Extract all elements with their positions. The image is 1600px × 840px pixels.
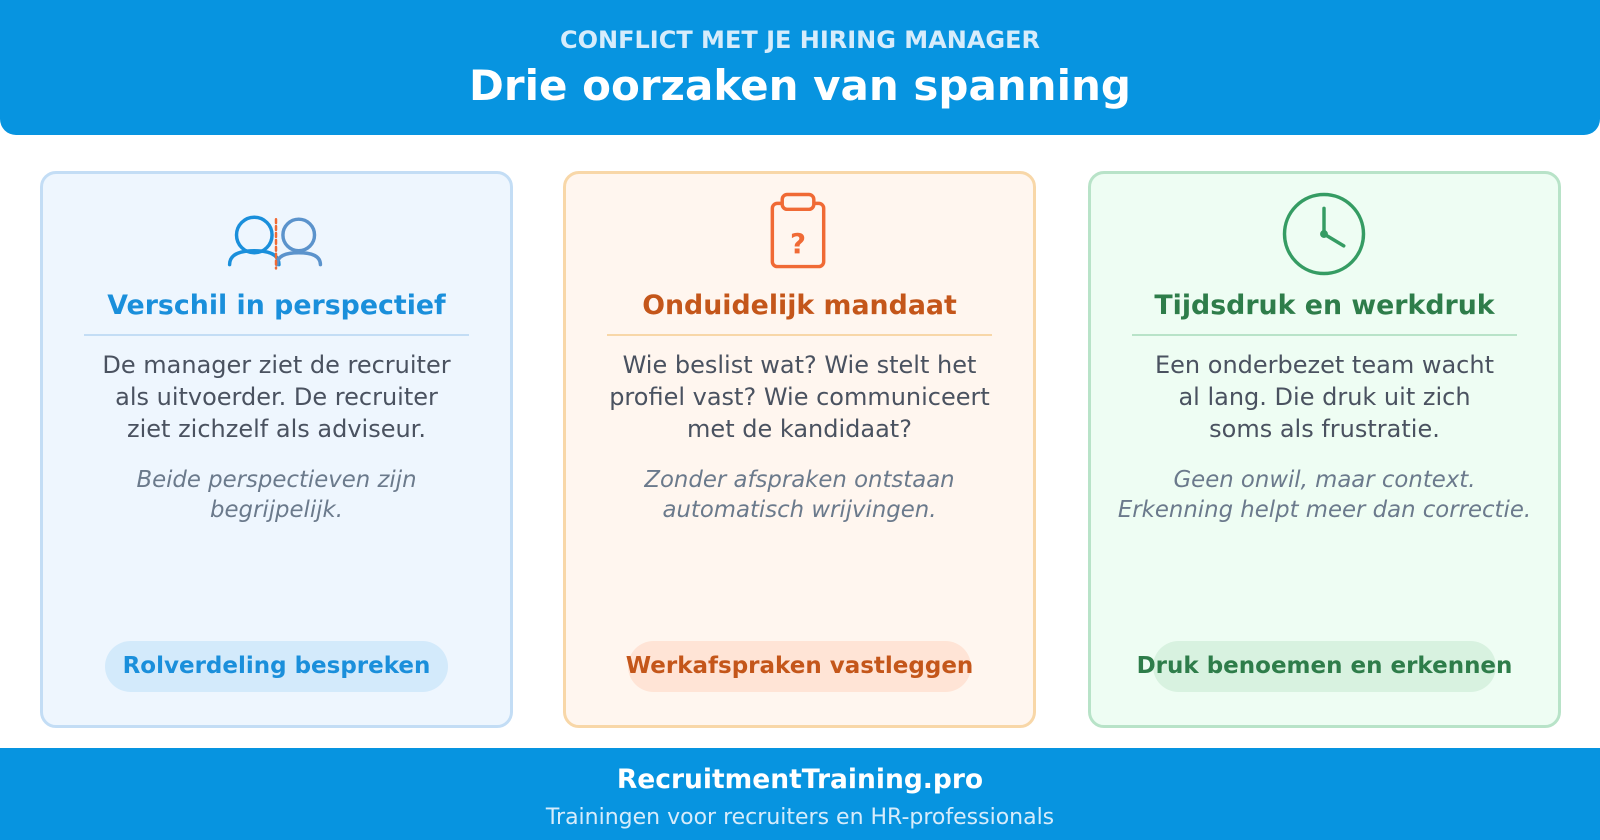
subtitle: CONFLICT MET JE HIRING MANAGER	[560, 26, 1040, 54]
body text: als uitvoerder. De recruiter	[115, 383, 438, 411]
pill: action: Druk benoemen en erkennen	[1137, 653, 1512, 679]
body text	[102, 351, 451, 443]
heading: Verschil in perspectief	[107, 290, 446, 321]
italic note	[136, 467, 417, 523]
body text: ziet zichzelf als adviseur.	[127, 415, 426, 443]
body text: al lang. Die druk uit zich	[1178, 383, 1471, 411]
pill: action	[1153, 641, 1496, 692]
body text	[609, 351, 990, 443]
italic note	[644, 467, 955, 523]
header	[0, 0, 1600, 135]
pill: action: Werkafspraken vastleggen	[626, 653, 973, 679]
panel: tijdsdruk	[1088, 171, 1561, 728]
panel: perspectief	[40, 171, 513, 728]
icon: clipboard	[770, 192, 826, 268]
italic note: Geen onwil, maar context.	[1174, 467, 1475, 493]
body text	[1155, 351, 1494, 443]
body text: met de kandidaat?	[687, 415, 912, 443]
panel: mandaat	[563, 171, 1036, 728]
body text: soms als frustratie.	[1209, 415, 1440, 443]
italic note: begrijpelijk.	[210, 497, 343, 523]
body text: De manager ziet de recruiter	[102, 351, 451, 379]
icon: clock	[1282, 192, 1366, 276]
title: Drie oorzaken van spanning	[469, 61, 1131, 110]
footer brand: RecruitmentTraining.pro	[617, 764, 983, 795]
italic note	[1118, 467, 1531, 523]
heading: Tijdsdruk en werkdruk	[1154, 290, 1495, 321]
footer	[0, 748, 1600, 840]
icon: two people	[228, 216, 322, 270]
body text: Wie beslist wat? Wie stelt het	[623, 351, 976, 379]
pill: action: Rolverdeling bespreken	[123, 653, 430, 679]
body text: Een onderbezet team wacht	[1155, 351, 1494, 379]
pill: action	[105, 641, 448, 692]
italic note: Zonder afspraken ontstaan	[644, 467, 955, 493]
icon: clipboard: ?	[790, 227, 806, 260]
footer tagline: Trainingen voor recruiters en HR-professionals	[546, 805, 1054, 830]
pill: action	[628, 641, 971, 692]
italic note: Beide perspectieven zijn	[136, 467, 417, 493]
italic note: automatisch wrijvingen.	[662, 497, 936, 523]
italic note: Erkenning helpt meer dan correctie.	[1118, 497, 1531, 523]
heading: Onduidelijk mandaat	[642, 290, 957, 321]
body text: profiel vast? Wie communiceert	[609, 383, 990, 411]
